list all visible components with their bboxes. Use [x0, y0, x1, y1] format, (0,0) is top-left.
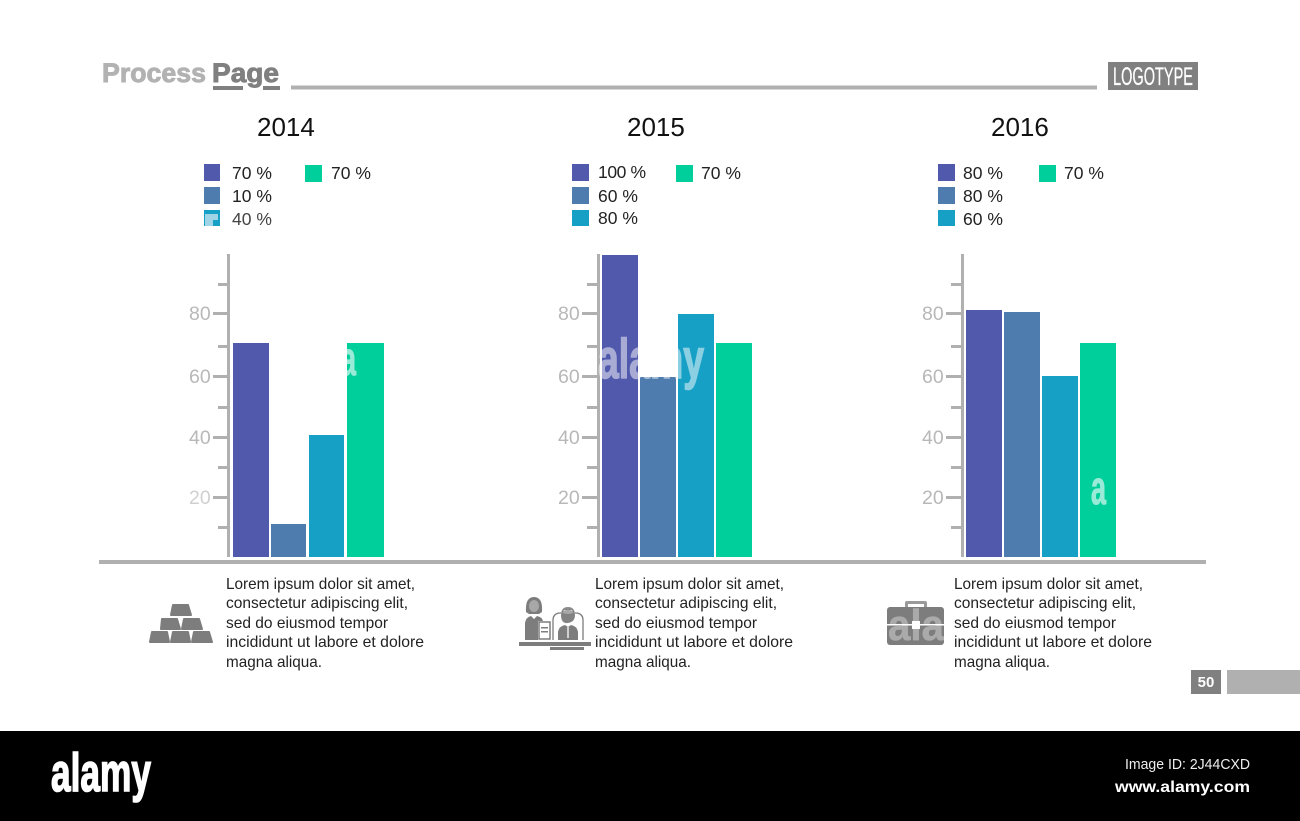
text block: 2014: magna aliqua.	[226, 654, 322, 671]
legend: 2014	[204, 163, 371, 229]
title: Page	[212, 58, 279, 88]
legend: 2015: 70 %	[701, 163, 741, 183]
panel: 2016	[887, 112, 1152, 671]
legend: 2014: 10 %	[232, 186, 272, 206]
legend: 2014: 70 %	[232, 163, 272, 183]
page number	[1191, 670, 1300, 694]
bar chart: 2014: 80	[189, 303, 211, 325]
bar chart: 2014: 60	[189, 366, 211, 388]
icon: briefcase: ala	[888, 601, 944, 650]
icon: gold bars	[150, 605, 212, 642]
logotype	[1108, 62, 1198, 91]
legend: 2015	[572, 162, 741, 228]
title	[102, 58, 280, 90]
legend: 2014: 40 %	[232, 209, 272, 229]
legend: 2014: 70 %	[331, 163, 371, 183]
logotype: LOGOTYPE	[1113, 63, 1193, 91]
bar chart: 2015: 40	[558, 427, 580, 449]
text block: 2014: consectetur adipiscing elit,	[226, 595, 408, 612]
text block: 2015: Lorem ipsum dolor sit amet,	[595, 576, 784, 593]
bar chart: 2016: 20	[922, 487, 944, 509]
text block: 2015: incididunt ut labore et dolore	[595, 634, 793, 651]
bar chart: 2014: 40	[189, 427, 211, 449]
bar chart: 2015: alamy	[598, 327, 704, 390]
text block: 2015	[595, 576, 793, 671]
legend: 2015: 100 %	[598, 162, 646, 182]
bar chart: 2016: 40	[922, 427, 944, 449]
heading: 2014: 2014	[257, 112, 315, 142]
website: www.alamy.com	[1114, 779, 1250, 796]
title: Process	[102, 58, 206, 88]
panel: 2014	[150, 112, 424, 671]
bar chart: 2015: 80	[558, 303, 580, 325]
bar chart: 2014: a	[341, 332, 356, 385]
text block: 2016: consectetur adipiscing elit,	[954, 595, 1136, 612]
footer: watermark banner	[0, 731, 1300, 821]
text block: 2016: sed do eiusmod tempor	[954, 615, 1117, 632]
bar chart: 2016: a	[1091, 461, 1106, 514]
image id: Image ID: 2J44CXD	[1125, 756, 1250, 773]
text block: 2014	[226, 576, 424, 671]
legend: 2016	[938, 163, 1104, 229]
bar chart: 2015: 20	[558, 487, 580, 509]
icon: people at desk	[519, 597, 591, 650]
legend: 2015: 60 %	[598, 186, 638, 206]
text block: 2016: incididunt ut labore et dolore	[954, 634, 1152, 651]
text block: 2015: consectetur adipiscing elit,	[595, 595, 777, 612]
text block: 2014: sed do eiusmod tempor	[226, 615, 389, 632]
bar chart: 2014	[189, 254, 384, 557]
brand logo: alamy	[51, 743, 151, 803]
text block: 2016: Lorem ipsum dolor sit amet,	[954, 576, 1143, 593]
text block: 2015: sed do eiusmod tempor	[595, 615, 758, 632]
page number: 50	[1198, 674, 1214, 691]
text block: 2016: magna aliqua.	[954, 654, 1050, 671]
text block: 2014: incididunt ut labore et dolore	[226, 634, 424, 651]
bar chart: 2014: 20	[189, 487, 211, 509]
legend: 2016: 80 %	[963, 186, 1003, 206]
bar chart: 2015	[558, 254, 752, 557]
panel: 2015	[519, 112, 793, 671]
bar chart: 2015: 60	[558, 366, 580, 388]
legend: 2016: 60 %	[963, 209, 1003, 229]
heading: 2015: 2015	[627, 112, 685, 142]
bar chart: 2016: 80	[922, 303, 944, 325]
text block: 2015: magna aliqua.	[595, 654, 691, 671]
text block: 2014: Lorem ipsum dolor sit amet,	[226, 576, 415, 593]
legend: 2016: 80 %	[963, 163, 1003, 183]
bar chart: 2016	[922, 254, 1116, 557]
bar chart: 2016: 60	[922, 366, 944, 388]
heading: 2016: 2016	[991, 112, 1049, 142]
header	[102, 58, 1198, 91]
legend: 2016: 70 %	[1064, 163, 1104, 183]
baseline	[99, 560, 1206, 564]
legend: 2015: 80 %	[598, 208, 638, 228]
text block: 2016	[954, 576, 1152, 671]
